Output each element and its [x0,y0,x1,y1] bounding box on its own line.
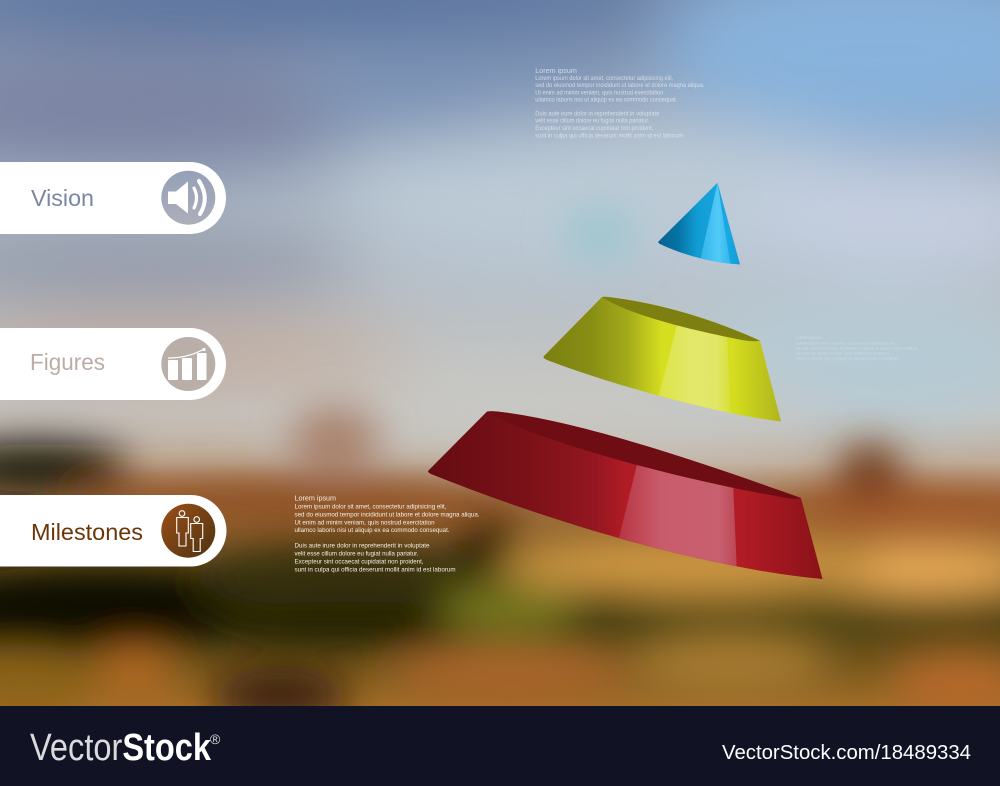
text block: middle: Ut enim ad minim veniam, quis nostrud exercitation [796,350,889,356]
text block: bottom: Excepteur sint occaecat cupidatat non proident, [294,558,424,565]
text block: middle: ullamco laboris nisi ut aliquip ex ea commodo consequat. [796,356,898,360]
logo: VectorStock: VectorStock [30,727,212,769]
text block: top: sunt in culpa qui officia deserunt mollit anim id est laborum [535,132,683,139]
label: Milestones: Milestones [31,519,143,545]
text block: bottom: sed do eiusmod tempor incididunt ut labore et dolore magna aliqua. [294,511,480,518]
text block: middle: Lorem ipsum dolor sit amet, consectetur adipisicing elit, [796,340,896,346]
text block: bottom: velit esse cillum dolore eu fugiat nulla pariatur. [294,550,419,557]
tab: Vision [0,162,226,234]
label: Figures: Figures [30,349,105,375]
icon: speaker [161,171,215,225]
cone highlight [700,184,730,264]
icon: bar chart [161,337,215,391]
text block: bottom: Lorem ipsum dolor sit amet, consectetur adipisicing elit, [294,504,447,511]
label: Vision: Vision [31,185,94,211]
inner rim [602,297,760,341]
inner rim [487,411,801,499]
text block: top [535,66,705,139]
text block: bottom: ullamco laboris nisi ut aliquip ex ea commodo consequat. [294,527,450,534]
text block: bottom: Duis aute irure dolor in reprehenderit in voluptate [294,543,430,550]
tab: Milestones [0,495,226,566]
cone: blue top [658,182,740,264]
yellow highlight [658,326,730,413]
red highlight [619,465,737,566]
text block: middle: sed do eiusmod tempor incididunt ut labore et dolore magna aliqua. [796,346,918,350]
text block: middle: Lorem ipsum [796,335,822,340]
text block: top: Duis aute irure dolor in reprehenderit in voluptate [535,110,660,117]
footer url: VectorStock.com/18489334 [722,742,971,764]
icon: two people [161,504,215,558]
text block: bottom [294,494,480,573]
logo: registered mark: ® [210,731,221,747]
text block: bottom: sunt in culpa qui officia deserunt mollit anim id est laborum [294,566,456,573]
text block: top: Lorem ipsum dolor sit amet, consectetur adipisicing elit, [535,75,674,82]
text block: bottom: Lorem ipsum [294,494,336,503]
tab: Figures [0,328,226,400]
text block: bottom: Ut enim ad minim veniam, quis nostrud exercitation [294,519,435,526]
text block: middle [796,335,918,360]
text block: top: Lorem ipsum [535,66,577,75]
footer bar [0,706,1000,786]
text block: top: sed do eiusmod tempor incididunt ut labore et dolore magna aliqua. [535,82,705,89]
frustum: red bottom [428,411,822,579]
text block: top: Ut enim ad minim veniam, quis nostrud exercitation [535,90,664,97]
text block: top: Excepteur sint occaecat cupidatat non proident, [535,125,654,132]
text block: top: ullamco laboris nisi ut aliquip ex ea commodo consequat. [535,96,678,103]
text block: top: velit esse cillum dolore eu fugiat nulla pariatur. [535,118,650,125]
frustum: yellow middle [543,297,781,422]
